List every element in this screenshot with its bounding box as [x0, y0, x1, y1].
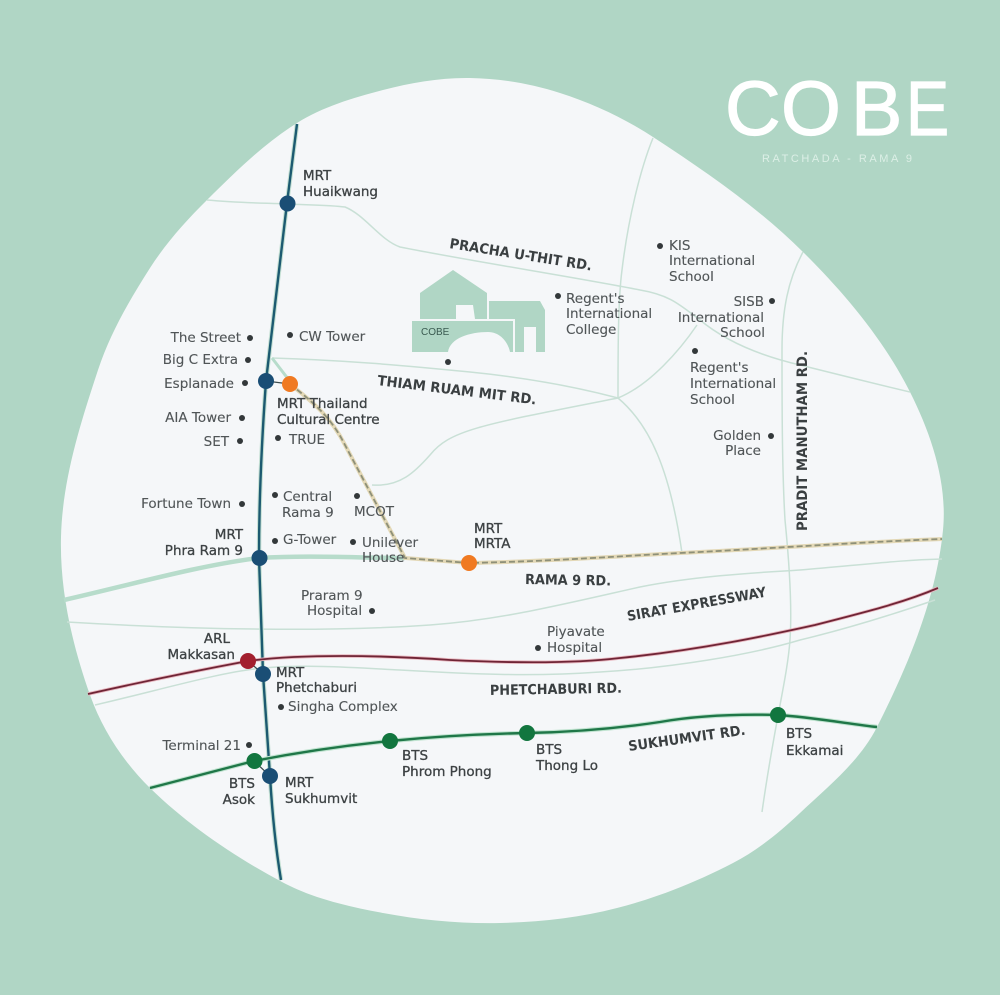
station labels: BTS: [786, 726, 812, 742]
road labels: THIAM RUAM MIT RD.: [377, 373, 537, 408]
place labels: International: [566, 306, 652, 322]
stations: MRT blue: [252, 196, 296, 784]
project building icon: COBE: [421, 327, 450, 338]
place labels: SET: [204, 434, 230, 450]
station labels: ARL: [204, 631, 230, 647]
road: diagonal green link: [272, 358, 292, 384]
stations: BTS green: [246, 707, 786, 769]
station labels: Asok: [223, 792, 255, 808]
station labels: Cultural Centre: [277, 412, 380, 428]
place labels: KIS: [669, 238, 690, 254]
station labels: MRT: [474, 521, 503, 537]
place labels: CW Tower: [299, 329, 366, 345]
place labels: AIA Tower: [165, 410, 231, 426]
place labels: Regent's: [690, 360, 749, 376]
place labels: Unilever: [362, 535, 419, 551]
place labels: MCOT: [354, 504, 395, 520]
station labels: Phrom Phong: [402, 764, 492, 780]
place labels: International: [669, 253, 755, 269]
place labels: Rama 9: [282, 505, 334, 521]
station labels: BTS: [229, 776, 255, 792]
place labels: Place: [725, 443, 761, 459]
station labels: Thong Lo: [535, 758, 598, 774]
place labels: Praram 9: [301, 588, 363, 604]
place labels: Hospital: [307, 603, 362, 619]
place labels: SISB: [734, 294, 764, 310]
road labels: PRADIT MANUTHAM RD.: [795, 351, 811, 531]
place labels: TRUE: [288, 432, 325, 448]
place labels: Big C Extra: [163, 352, 238, 368]
road labels: PHETCHABURI RD.: [490, 681, 622, 699]
line: Airport Rail Link: [88, 588, 938, 694]
station labels: Phra Ram 9: [165, 543, 243, 559]
line: MRT blue: [259, 124, 297, 880]
place labels: Singha Complex: [288, 699, 398, 715]
place labels: The Street: [170, 330, 241, 346]
station labels: MRT Thailand: [277, 396, 368, 412]
logo: COBE: B: [851, 66, 902, 152]
connectors between interchange stations: [248, 381, 290, 776]
road labels: PRACHA U-THIT RD.: [448, 236, 593, 274]
place labels: International: [678, 310, 764, 326]
place labels: Golden: [713, 428, 761, 444]
place labels: Regent's: [566, 291, 625, 307]
station labels: BTS: [402, 748, 428, 764]
station labels: Ekkamai: [786, 743, 843, 759]
place labels: School: [669, 269, 714, 285]
station labels: Makkasan: [168, 647, 235, 663]
station labels: Sukhumvit: [285, 791, 357, 807]
logo: COBE: C: [725, 66, 781, 152]
place labels: School: [720, 325, 765, 341]
line: BTS green: [150, 715, 877, 788]
place labels: [141, 238, 776, 754]
road labels: SUKHUMVIT RD.: [627, 723, 746, 755]
place labels: Terminal 21: [161, 738, 241, 754]
place labels: College: [566, 322, 616, 338]
place labels: Central: [283, 489, 332, 505]
logo: COBE: O: [781, 66, 841, 152]
map area blob: [61, 78, 944, 923]
road labels: RAMA 9 RD.: [525, 572, 611, 590]
line: MRT orange route: [290, 384, 942, 563]
logo: COBE: [725, 66, 949, 165]
place labels: School: [690, 392, 735, 408]
road labels: SIRAT EXPRESSWAY: [626, 585, 768, 625]
station labels: BTS: [536, 742, 562, 758]
logo: COBE: RATCHADA - RAMA 9: [762, 153, 912, 165]
station labels: MRT: [285, 775, 314, 791]
road labels: [377, 236, 811, 755]
place labels: Fortune Town: [141, 496, 231, 512]
minor roads: [67, 138, 942, 812]
place labels: House: [362, 550, 404, 566]
station: ARL red: [240, 653, 256, 669]
project building icon: [412, 270, 545, 352]
place labels: Piyavate: [547, 624, 605, 640]
station labels: Huaikwang: [303, 184, 378, 200]
place labels: Hospital: [547, 640, 602, 656]
place labels: Esplanade: [164, 376, 234, 392]
place labels: International: [690, 376, 776, 392]
station labels: MRT: [215, 527, 244, 543]
station labels: Phetchaburi: [276, 680, 357, 696]
road: Rama 9 west section: [64, 557, 405, 600]
station labels: MRTA: [474, 536, 511, 552]
station labels: [165, 168, 843, 808]
station labels: MRT: [303, 168, 332, 184]
station labels: MRT: [276, 665, 305, 681]
place markers: [237, 243, 775, 748]
place labels: G-Tower: [283, 532, 337, 548]
logo: COBE: E: [906, 67, 949, 152]
stations: MRT orange: [282, 376, 477, 571]
